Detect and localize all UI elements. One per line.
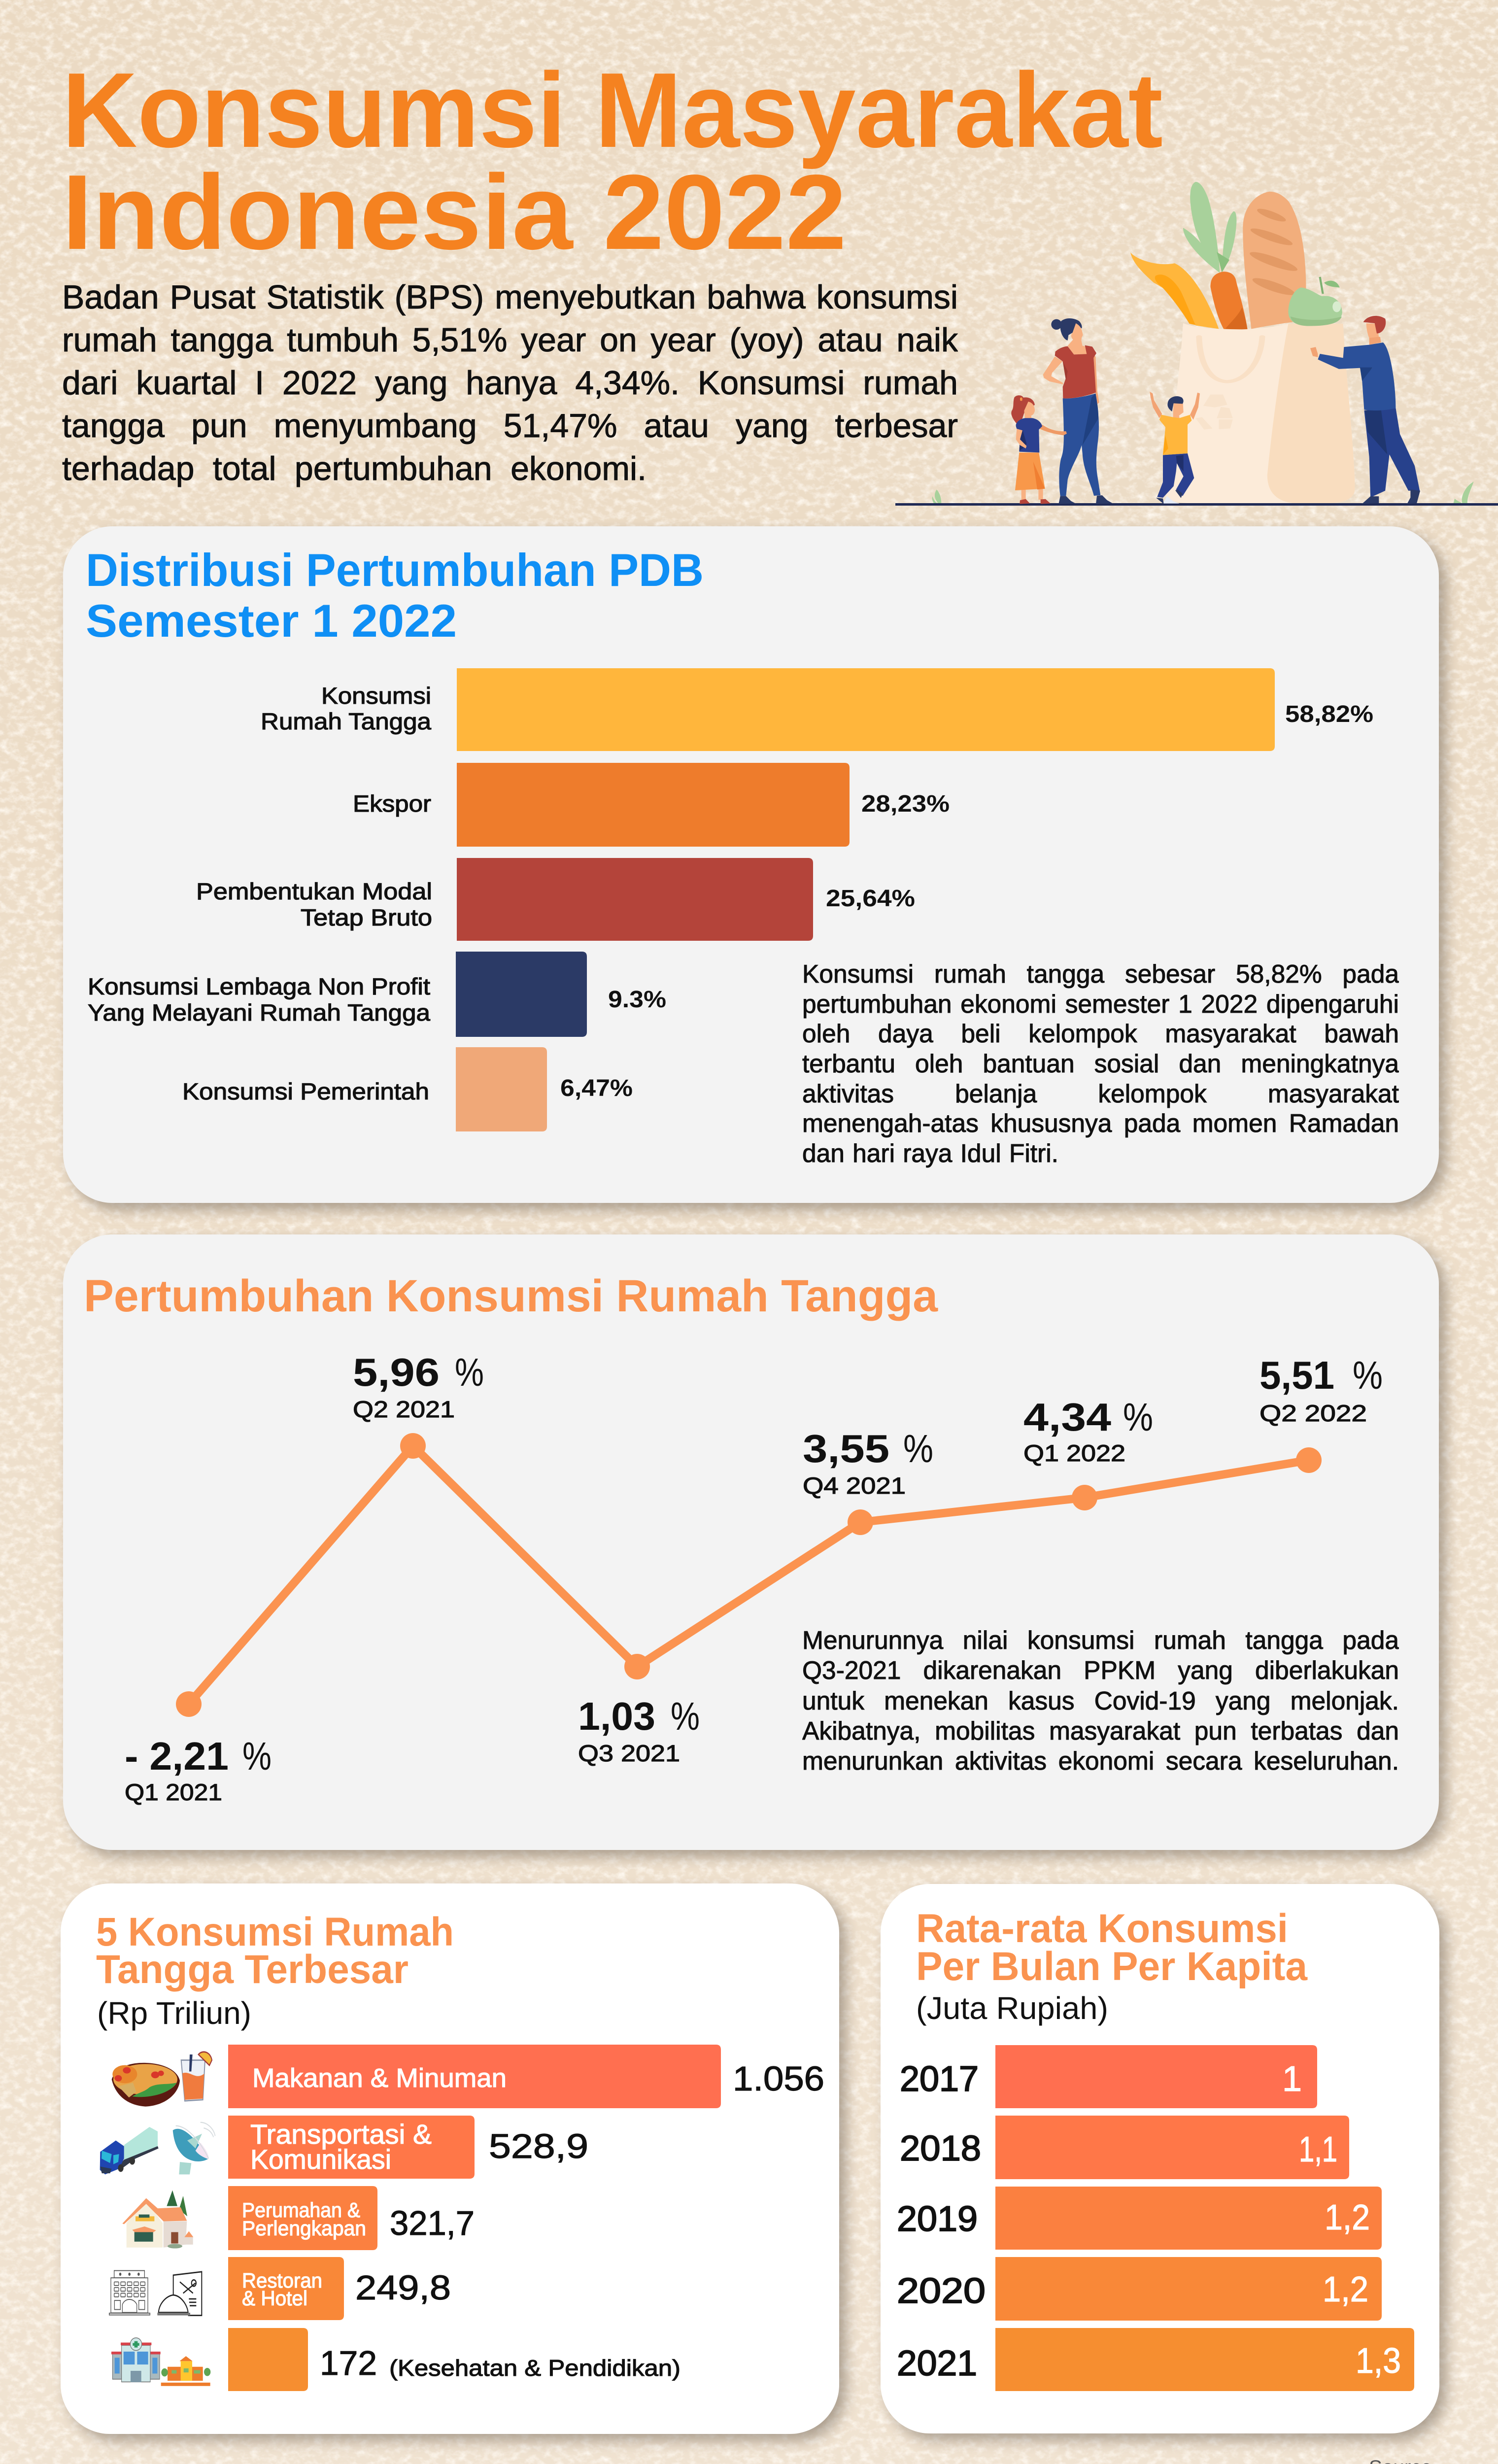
bar: 2018 bbox=[900, 2116, 1349, 2179]
intro text block: Badan Pusat Statistik (BPS) menyebutkan bahwa konsumsi bbox=[62, 278, 958, 316]
bar: pembentukan modal tetap bruto: Pembentukan Modal bbox=[196, 878, 432, 904]
bar: kesehatan dan pendidikan: (Kesehatan & Pendidikan) bbox=[389, 2355, 681, 2381]
data label: Q2 2021: % bbox=[455, 1350, 484, 1394]
text block: growth explanation: Q3-2021 dikarenakan PPKM yang diberlakukan bbox=[802, 1656, 1399, 1684]
bar: konsumsi pemerintah: Konsumsi Pemerintah bbox=[182, 1078, 429, 1104]
data label: Q3 2021: Q3 2021 bbox=[578, 1740, 680, 1766]
bar: transportasi dan komunikasi bbox=[228, 2116, 588, 2179]
data label: Q2 2022: 5,51 bbox=[1260, 1353, 1334, 1397]
data label: Q2 2022: % bbox=[1353, 1353, 1383, 1397]
bar: pembentukan modal tetap bruto: 25,64% bbox=[826, 886, 915, 912]
data label: Q2 2021: 5,96 bbox=[353, 1350, 440, 1394]
title bbox=[62, 50, 1163, 272]
person: girl bbox=[1011, 395, 1067, 504]
bar: restoran dan hotel: & Hotel bbox=[242, 2287, 307, 2310]
heading: Per Bulan Per Kapita bbox=[916, 1944, 1308, 1989]
icon: apple bbox=[1288, 277, 1342, 326]
bar: konsumsi pemerintah: 6,47% bbox=[560, 1075, 633, 1101]
icon: bread bbox=[1243, 192, 1306, 329]
text block: PDB explanation: Konsumsi rumah tangga sebesar 58,82% pada bbox=[802, 959, 1399, 988]
data label: Q4 2021: Q4 2021 bbox=[803, 1472, 906, 1499]
bar: 2020 bbox=[897, 2257, 1382, 2321]
bar: perumahan dan perlengkapan: Perlengkapan bbox=[242, 2217, 366, 2240]
icon: carrot bbox=[1210, 272, 1248, 330]
panel: 5 konsumsi rumah tangga terbesar bbox=[61, 1883, 839, 2434]
icon: leaves bbox=[1183, 182, 1236, 273]
bar: pembentukan modal tetap bruto: Tetap Bruto bbox=[301, 904, 432, 930]
heading: Tangga Terbesar bbox=[96, 1947, 409, 1992]
bar: 2019: 1,2 bbox=[1325, 2198, 1370, 2237]
data label: Q1 2022: 4,34 bbox=[1023, 1395, 1112, 1439]
bar: ekspor: Ekspor bbox=[353, 790, 431, 817]
bar: 2018: 1,1 bbox=[1299, 2130, 1337, 2169]
bar: perumahan dan perlengkapan bbox=[228, 2186, 475, 2250]
bar: konsumsi rumah tangga: Rumah Tangga bbox=[261, 708, 432, 734]
bar: perumahan dan perlengkapan: 321,7 bbox=[390, 2204, 475, 2242]
bar: restoran dan hotel bbox=[228, 2257, 451, 2320]
data label: Q1 2022: % bbox=[1123, 1395, 1153, 1439]
bar: makanan dan minuman: 1.056 bbox=[733, 2059, 824, 2098]
icon: bag bbox=[1166, 323, 1355, 503]
heading: (Juta Rupiah) bbox=[916, 1990, 1108, 2026]
heading: 5 Konsumsi Rumah bbox=[96, 1910, 454, 1954]
heading: (Rp Triliun) bbox=[97, 1995, 251, 2031]
bar: konsumsi rumah tangga: 58,82% bbox=[1285, 701, 1373, 727]
person: woman bbox=[1043, 318, 1113, 504]
data label: Q4 2021 bbox=[803, 1427, 933, 1499]
bar: kesehatan dan pendidikan: 172 bbox=[320, 2344, 377, 2382]
text block: growth explanation: untuk menekan kasus Covid-19 yang melonjak. bbox=[802, 1686, 1399, 1715]
data label: Q1 2021: - 2,21 bbox=[125, 1734, 229, 1778]
text block: growth explanation: Akibatnya, mobilitas masyarakat pun terbatas dan bbox=[802, 1716, 1399, 1745]
data label: Q3 2021: 1,03 bbox=[578, 1694, 655, 1738]
bar: kesehatan dan pendidikan bbox=[228, 2328, 681, 2391]
data label: Q2 2021: Q2 2021 bbox=[353, 1396, 455, 1422]
bar: 2019: 2019 bbox=[897, 2199, 978, 2239]
bar: konsumsi rumah tangga: Konsumsi bbox=[321, 683, 431, 709]
text block: PDB explanation: terbantu oleh bantuan sosial dan meningkatnya bbox=[802, 1049, 1399, 1078]
bar: transportasi dan komunikasi: Transportasi & bbox=[250, 2119, 432, 2150]
title: Konsumsi Masyarakat bbox=[62, 50, 1163, 170]
intro text block bbox=[62, 276, 958, 493]
intro text block: dari kuartal I 2022 yang hanya 4,34%. Konsumsi rumah bbox=[62, 364, 958, 402]
data label: Q1 2022: Q1 2022 bbox=[1023, 1440, 1125, 1466]
icon: hotel and restaurant bbox=[109, 2271, 202, 2315]
icon: hospital and school bbox=[111, 2338, 210, 2386]
heading: Pertumbuhan Konsumsi Rumah Tangga bbox=[84, 1271, 938, 1321]
bar: konsumsi lembaga non profit: Yang Melayani Rumah Tangga bbox=[88, 999, 431, 1026]
bar: 2020: 1,2 bbox=[1323, 2270, 1368, 2309]
bar: 2017: 1 bbox=[1282, 2059, 1302, 2099]
bar: 2021: 1,3 bbox=[1356, 2341, 1401, 2381]
bar: konsumsi lembaga non profit: 9.3% bbox=[608, 987, 666, 1013]
icon: yellow vegetable bbox=[1130, 252, 1219, 329]
line chart bbox=[176, 1433, 1322, 1717]
data label: Q4 2021: % bbox=[903, 1427, 933, 1471]
bar: 2017: 2017 bbox=[900, 2059, 979, 2099]
bar: 2021 bbox=[897, 2328, 1414, 2391]
data label: Q1 2021 bbox=[125, 1734, 272, 1805]
text block: PDB explanation: aktivitas belanja kelompok masyarakat bbox=[802, 1079, 1399, 1108]
data label: Q1 2021: Q1 2021 bbox=[125, 1779, 222, 1805]
data label: Q2 2021 bbox=[353, 1350, 484, 1422]
bar: makanan dan minuman: Makanan & Minuman bbox=[252, 2063, 507, 2093]
text block: growth explanation: Menurunnya nilai konsumsi rumah tangga pada bbox=[802, 1626, 1399, 1654]
text block: PDB explanation: dan hari raya Idul Fitri. bbox=[802, 1139, 1058, 1167]
icon: food bowl and drink bbox=[112, 2052, 212, 2107]
heading: Semester 1 2022 bbox=[86, 595, 457, 647]
panel: rata-rata konsumsi per kapita bbox=[881, 1884, 1439, 2433]
data label: Q2 2022 bbox=[1260, 1353, 1383, 1426]
person: boy bbox=[1150, 392, 1200, 504]
bar: 2020: 2020 bbox=[897, 2271, 986, 2311]
bar: ekspor: 28,23% bbox=[861, 791, 950, 817]
bar: perumahan dan perlengkapan: Perumahan & bbox=[242, 2198, 360, 2222]
bar: 2019 bbox=[897, 2187, 1382, 2250]
icon: grass tufts bbox=[932, 481, 1474, 503]
heading: Distribusi Pertumbuhan PDB bbox=[86, 544, 704, 596]
text block: PDB explanation: oleh daya beli kelompok masyarakat bawah bbox=[802, 1019, 1399, 1048]
bar: restoran dan hotel: 249,8 bbox=[355, 2268, 451, 2307]
heading bbox=[86, 544, 704, 647]
bar: ekspor bbox=[353, 763, 950, 847]
heading bbox=[96, 1910, 454, 2031]
text block: growth explanation: menurunkan aktivitas ekonomi secara keseluruhan. bbox=[802, 1746, 1399, 1775]
text block: PDB explanation: menengah-atas khususnya pada momen Ramadan bbox=[802, 1109, 1399, 1137]
bar: konsumsi rumah tangga bbox=[261, 668, 1373, 751]
heading: Rata-rata Konsumsi bbox=[916, 1906, 1288, 1951]
bar: konsumsi pemerintah bbox=[182, 1047, 633, 1131]
data label: Q2 2022: Q2 2022 bbox=[1260, 1400, 1367, 1426]
icon: house bbox=[122, 2190, 193, 2249]
bar: transportasi dan komunikasi: Komunikasi bbox=[250, 2144, 391, 2175]
intro text block: tangga pun menyumbang 51,47% atau yang terbesar bbox=[62, 407, 958, 445]
title: Indonesia 2022 bbox=[62, 152, 847, 272]
bar: 2017 bbox=[900, 2045, 1317, 2108]
data label: Q3 2021 bbox=[578, 1694, 700, 1766]
bar: 2021: 2021 bbox=[897, 2344, 977, 2383]
bar: pembentukan modal tetap bruto bbox=[196, 858, 915, 941]
text block: PDB explanation bbox=[802, 959, 1399, 1171]
bar: makanan dan minuman bbox=[228, 2045, 824, 2108]
panel: distribusi pertumbuhan PDB bbox=[63, 526, 1439, 1203]
bar: konsumsi lembaga non profit bbox=[88, 952, 666, 1037]
data label: Q1 2021: % bbox=[242, 1734, 272, 1778]
bar: transportasi dan komunikasi: 528,9 bbox=[489, 2127, 588, 2165]
text block: growth explanation bbox=[802, 1625, 1399, 1783]
intro text block: rumah tangga tumbuh 5,51% year on year (yoy) atau naik bbox=[62, 321, 958, 359]
bar: restoran dan hotel: Restoran bbox=[242, 2269, 322, 2292]
icon: truck and satellite dish bbox=[100, 2122, 215, 2174]
intro text block: terhadap total pertumbuhan ekonomi. bbox=[62, 450, 647, 487]
heading bbox=[916, 1906, 1308, 2026]
illustration: family with shopping bag bbox=[895, 182, 1498, 506]
data label: Q3 2021: % bbox=[671, 1694, 700, 1738]
bar: 2018: 2018 bbox=[900, 2129, 981, 2168]
text block: PDB explanation: pertumbuhan ekonomi semester 1 2022 dipengaruhi bbox=[802, 990, 1399, 1018]
panel: pertumbuhan konsumsi rumah tangga bbox=[63, 1234, 1439, 1850]
bar: konsumsi lembaga non profit: Konsumsi Lembaga Non Profit bbox=[88, 973, 430, 999]
person: man bbox=[1310, 316, 1420, 504]
data label: Q1 2022 bbox=[1023, 1395, 1153, 1466]
data label: Q4 2021: 3,55 bbox=[803, 1427, 889, 1471]
